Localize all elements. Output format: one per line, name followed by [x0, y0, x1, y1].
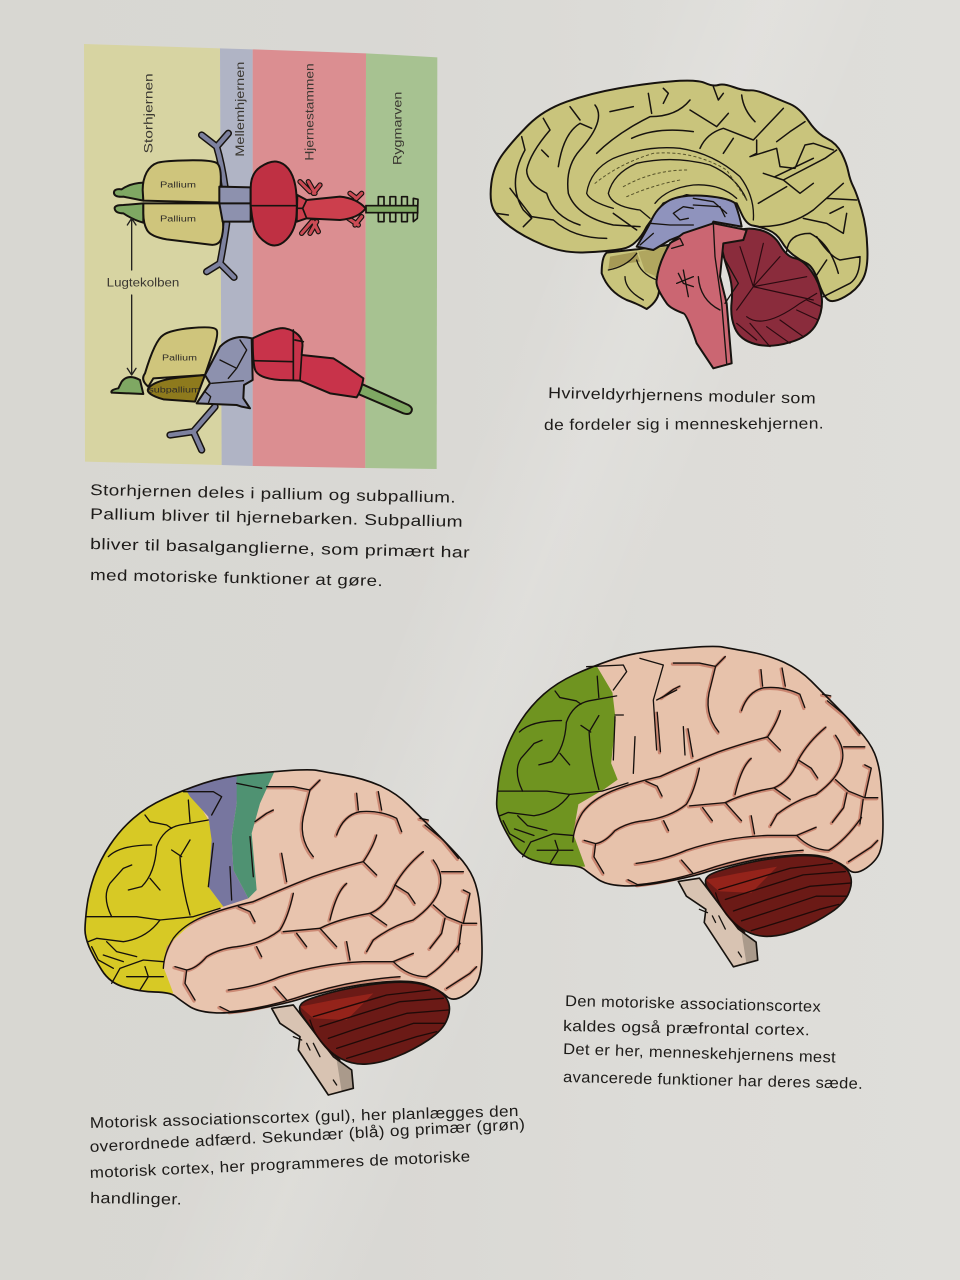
prefrontal region green: [498, 666, 618, 867]
caption: prefrontal cortex: Den motoriske associationscortex: [565, 993, 821, 1016]
motor association cortex yellow: [86, 790, 224, 994]
caption: vertebrate brain modules: [544, 385, 824, 434]
caption: motor cortex: [89, 1103, 526, 1209]
Pallium text side: Pallium: [162, 353, 197, 363]
optic nerve side view: [170, 407, 215, 450]
label: Mellemhjernen: Mellemhjernen: [233, 62, 247, 157]
cerebellum: [705, 856, 851, 936]
caption: pallium and subpallium: med motoriske funktioner at gøre.: [90, 567, 383, 590]
caption: vertebrate brain modules: de fordeler sig i menneskehjernen.: [544, 416, 824, 434]
caption: pallium and subpallium: bliver til basalganglierne, som primært har: [90, 536, 470, 562]
band: Mellemhjernen blue: [220, 48, 253, 466]
cerebellum: [300, 982, 449, 1064]
brain: lateral view prefrontal cortex green: [492, 637, 883, 967]
midbrain top: [251, 162, 297, 246]
label: Rygmarven: Rygmarven: [391, 91, 405, 165]
outline: [497, 646, 883, 886]
diencephalon blue: [637, 195, 742, 250]
subpallium: [148, 375, 205, 402]
spinal cord top view: [366, 197, 418, 222]
brain: lateral view motor areas: [80, 760, 482, 1095]
Pallium text top: Pallium: [160, 180, 196, 190]
diencephalon side: [197, 337, 253, 408]
sulci shading: [572, 657, 877, 886]
caption: vertebrate brain modules: Hvirveldyrhjernens moduler som: [548, 385, 816, 408]
brainstem pink: [656, 223, 747, 368]
caption: prefrontal cortex: [563, 993, 863, 1093]
label: Lugtekolben with arrows: [107, 218, 179, 375]
primary motor cortex green: [232, 767, 277, 898]
brainstem side: [253, 328, 363, 397]
frontal sulci: [498, 676, 628, 863]
olfactory bulbs top: [114, 183, 143, 201]
caption: motor cortex: motorisk cortex, her programmeres de motoriske: [89, 1148, 471, 1182]
pallium top: [143, 160, 221, 203]
cortex base: [85, 770, 482, 1013]
Subpallium text: subpallium: [148, 386, 200, 395]
brainstem: [678, 878, 758, 967]
diencephalon top: [219, 187, 251, 222]
brainstem: [272, 1005, 353, 1095]
extra sulci: [587, 658, 685, 773]
panel: brain module diagram: [84, 44, 437, 469]
frontal sulci: [87, 800, 220, 990]
pallium side: [143, 327, 217, 387]
caption: pallium and subpallium: Pallium bliver til hjernebarken. Subpallium: [90, 506, 463, 531]
caption: motor cortex: overordnede adfærd. Sekundær (blå) og primær (grøn): [89, 1116, 526, 1156]
spinal cord side view: [357, 382, 412, 414]
band: Rygmarven green: [365, 53, 437, 469]
sulci lines: [163, 780, 477, 1012]
label: Lugtekolben with arrows: Lugtekolben: [107, 276, 179, 290]
caption: prefrontal cortex: kaldes også præfrontal cortex.: [563, 1018, 810, 1039]
sulci shading: [162, 781, 476, 1013]
outline: [85, 770, 482, 1013]
caption: pallium and subpallium: Storhjernen deles i pallium og subpallium.: [90, 482, 456, 507]
cortex base: [497, 646, 883, 886]
optic nerves top view: [202, 133, 234, 277]
cerebellum dark red: [721, 229, 822, 347]
hindbrain top: [297, 195, 366, 222]
olfactory bulb side: [111, 377, 143, 394]
caption: prefrontal cortex: avancerede funktioner har deres sæde.: [563, 1069, 863, 1093]
nerves on brainstem: [300, 182, 362, 233]
cerebrum: [491, 81, 867, 301]
sulci lines: [573, 657, 878, 885]
label: Hjernestammen: Hjernestammen: [302, 63, 316, 161]
caption: prefrontal cortex: Det er her, menneskehjernens mest: [563, 1041, 837, 1067]
caption: motor cortex: Motorisk associationscortex (gul), her planlægges den: [90, 1103, 519, 1132]
band: Storhjernen yellow: [84, 44, 222, 465]
caption: pallium and subpallium: [90, 482, 470, 590]
Pallium text bottom: Pallium: [160, 213, 196, 223]
caption: motor cortex: handlinger.: [90, 1190, 182, 1209]
brain: medial view with coloured modules: [491, 81, 867, 368]
label: Storhjernen: Storhjernen: [142, 73, 156, 153]
secondary motor cortex blue: [186, 776, 248, 907]
diagram: top view of brain: [114, 133, 418, 277]
temporal lobe: [602, 245, 668, 309]
band: Hjernestammen red: [253, 49, 366, 468]
motor sulci: [183, 783, 262, 900]
diagram: side view of brain: [111, 327, 412, 450]
